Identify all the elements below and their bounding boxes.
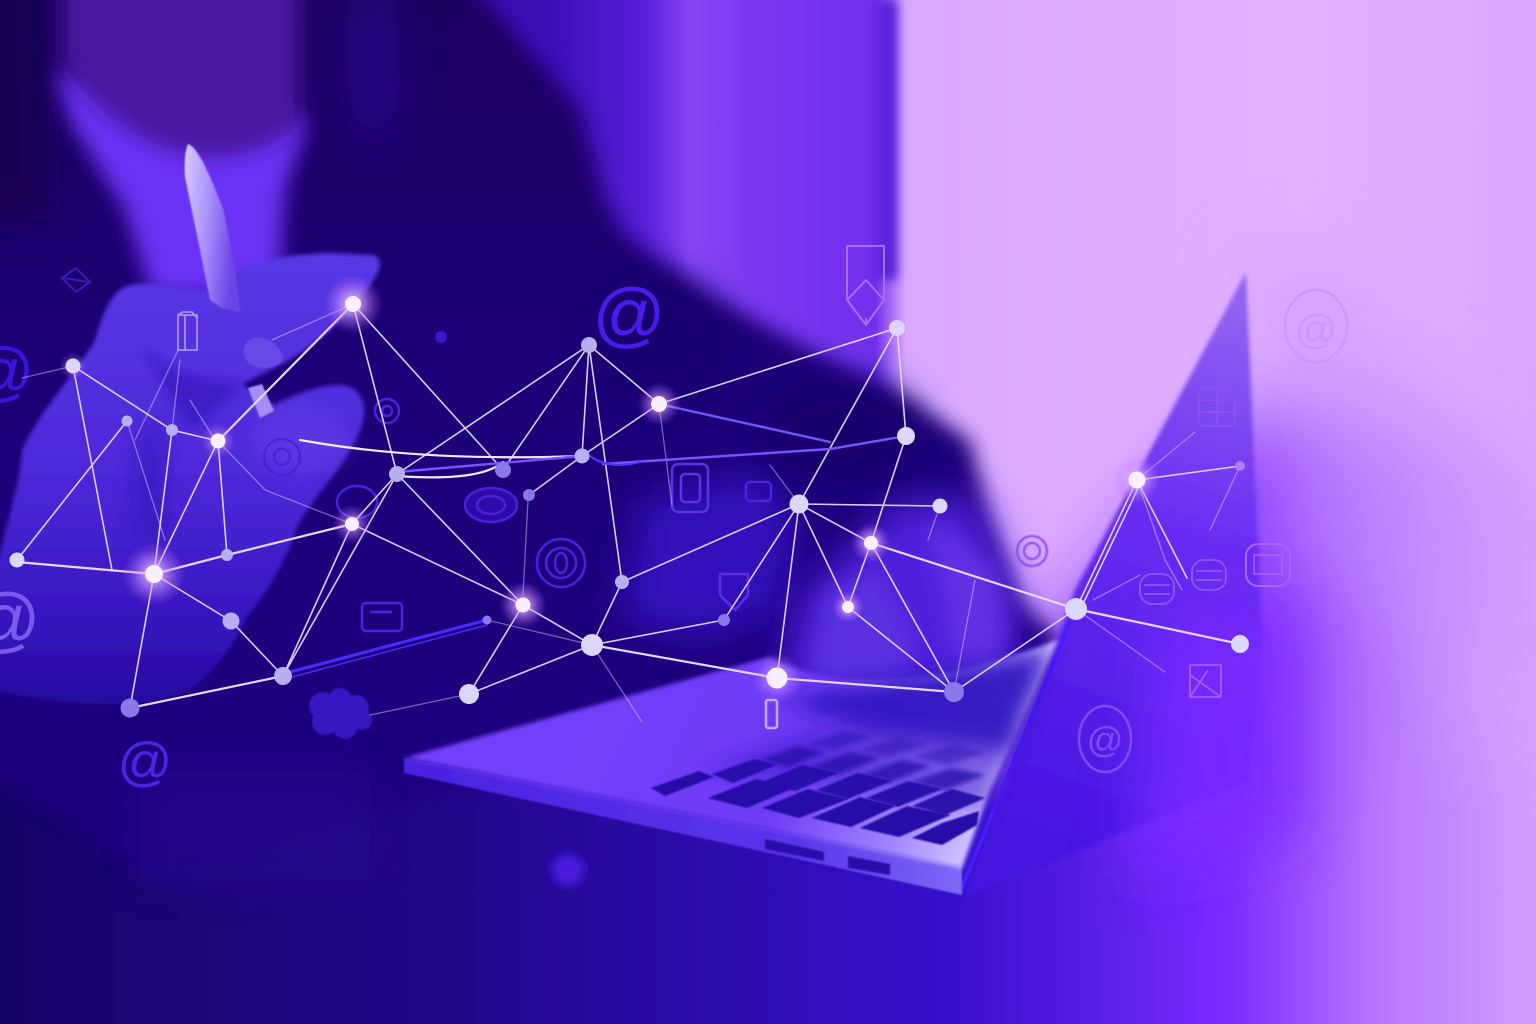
icon: envelope xyxy=(62,268,90,292)
icon: pencil document xyxy=(847,246,884,325)
icons: at signs: @ xyxy=(592,275,666,355)
icons: at signs: @ xyxy=(1295,306,1337,353)
icon: small spiral near keyboard hand xyxy=(1017,536,1047,566)
icon: phone xyxy=(766,700,777,728)
icon: spirals xyxy=(264,399,585,587)
icons: at signs: @ xyxy=(1087,719,1123,760)
icons: at signs xyxy=(0,275,1347,792)
side ports xyxy=(765,839,890,875)
laptop screen xyxy=(960,272,1300,897)
hand xyxy=(0,253,380,704)
fingernail xyxy=(244,337,283,368)
shirt xyxy=(55,70,308,295)
keyboard keys xyxy=(651,731,985,845)
neck xyxy=(62,0,300,157)
finger shading xyxy=(143,350,243,430)
pen xyxy=(185,144,274,418)
icon: battery xyxy=(178,312,197,350)
network nodes xyxy=(10,296,1249,718)
icon: rounded boxes xyxy=(362,464,771,631)
person: dark jacket and shirt xyxy=(0,0,1060,880)
network lines xyxy=(17,304,1240,722)
icons: line glyphs floating around the network xyxy=(62,246,1290,728)
laptop deck xyxy=(404,640,1058,868)
glow halos xyxy=(59,274,1161,704)
laptop side wall xyxy=(404,758,962,895)
laptop base and keyboard xyxy=(404,640,1058,895)
table surface xyxy=(0,716,1536,1024)
icon: right-side faint cards xyxy=(1140,378,1235,604)
icon: cloud xyxy=(309,688,372,739)
icons: at signs: @ xyxy=(118,732,172,792)
